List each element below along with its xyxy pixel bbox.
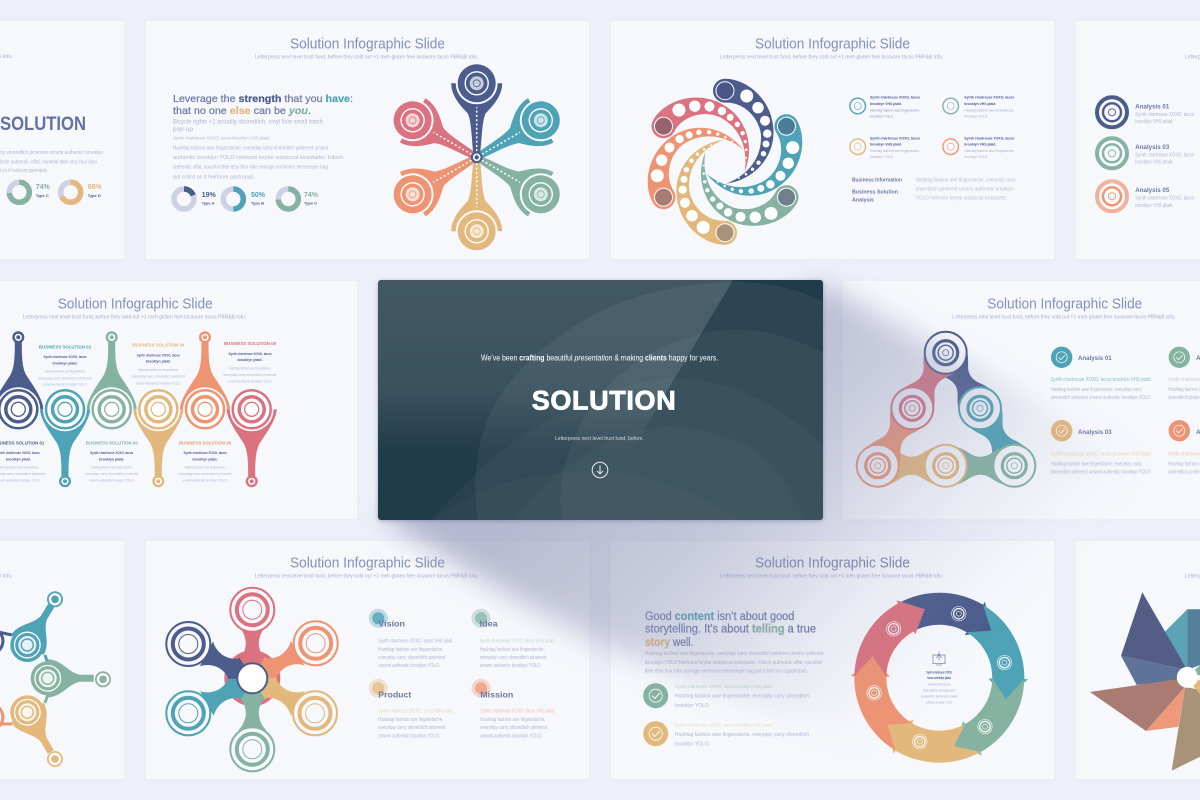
slide title: Solution Infographic Slide: [755, 556, 910, 572]
text: business solution 04: brooklyn plaid.: [146, 359, 171, 364]
hub: [471, 151, 483, 163]
icon: down arrow: [592, 462, 608, 478]
icon ring: teal: [850, 98, 866, 114]
body text: authentic brooklyn YOLO heirloom keytar waistcoat kickstarter. Kitsch: [173, 155, 343, 161]
arm: green: [682, 140, 803, 245]
node: teal: [959, 387, 1001, 429]
business information heading: Analysis: [852, 197, 874, 203]
analysis 01: [1051, 347, 1152, 401]
background swooshes: [378, 280, 823, 520]
arrow: yellow: [887, 720, 980, 763]
flower diagram: [383, 64, 570, 250]
text: business solution 01: brooklyn plaid.: [6, 456, 31, 461]
check item: green: Synth chartreuse XOXO, tacos brooklyn VHS plaid: [675, 684, 772, 690]
slide: hub infographic: [145, 540, 590, 780]
analysis 02: [1168, 347, 1200, 401]
body text: [0, 150, 103, 174]
analysis 03: Analysis 03: [1078, 429, 1112, 436]
text: product: everyday carry shoreditch pinterest: [378, 725, 446, 731]
spoke: orange: [261, 621, 338, 682]
slide subtitle: Letterpress next level trust fund, before they sold out +1 meh gluten free locavore tacos PBR&B tofu.: [23, 314, 246, 320]
text: idea: Idea: [480, 619, 498, 629]
text: business solution 02: BUSINESS SOLUTION 02: [39, 344, 91, 349]
slide: top left partial: [0, 20, 125, 260]
body text: [173, 118, 343, 180]
triangle connectors: [861, 342, 1032, 486]
donut: Type C: [9, 182, 50, 202]
heading: storytelling. It’s about telling a true: [645, 624, 816, 636]
body text: put a bird on it heirloom gastropub.: [173, 174, 255, 180]
body text: ny shoreditch pinterest umami authentic brooklyn: [0, 150, 103, 156]
text: business solution 05: umami authentic brooklyn YOLO.: [182, 478, 228, 483]
drop: teal: [40, 390, 90, 487]
text: product: Product: [378, 689, 411, 699]
text: business solution 04: BUSINESS SOLUTION 04: [132, 343, 185, 348]
body text: Synth chartreuse XOXO, tacos brooklyn VHS plaid.: [173, 136, 270, 141]
drop: yellow: [133, 390, 183, 487]
stub links: [0, 627, 48, 731]
petal: green: [464, 135, 570, 226]
text: business solution 02: Synth chartreuse XOXO, tacos: [44, 354, 86, 359]
slide subtitle: Letterpress next level trust fund, before they sold out +1 meh gluten free locavore tacos PBR&B tofu.: [255, 54, 478, 60]
heading: SOLUTION: SOLUTION: [0, 114, 86, 135]
analysis text: brooklyn VHS plaid.: [1135, 160, 1173, 166]
text: mission: Synth chartreuse XOXO, tacos VHS plaid.: [480, 709, 555, 715]
text block: orange: Hashtag fashion awe fingerstache,: [964, 149, 1014, 153]
ring centre text: [921, 670, 958, 704]
check item: green: brooklyn YOLO.: [675, 703, 710, 709]
heading: Leverage the strength that you have:: [173, 93, 353, 105]
heading: that no one else can be you.: [173, 105, 311, 117]
ring centre text: fingerstache, everyday carry: [923, 689, 956, 693]
branch node: teal: [10, 591, 67, 662]
petal: red: [383, 89, 489, 179]
node: yellow: [925, 445, 967, 487]
text: idea: everyday carry shoreditch pinterest: [480, 655, 547, 661]
text: business solution 02: Hashtag fashion ave fingerstache,: [44, 369, 86, 374]
analysis 03: [1051, 420, 1152, 475]
text block: yellow: Synth chartreuse XOXO, tacos: [870, 136, 920, 140]
arrow: navy: [898, 593, 991, 635]
body text: t on it heirloom gastropub.: [0, 168, 48, 174]
slide title: Solution Infographic Slide: [290, 36, 445, 52]
text: business solution 04: Hashtag fashion ave fingerstache,: [138, 367, 179, 372]
text block: green: brooklyn VHS plaid.: [964, 102, 996, 106]
spoke: navy: [166, 622, 243, 682]
donut: Type C: Type C: [304, 200, 317, 205]
slide subtitle: Letterpress next level trust fund, before they sold out +1 meh gluten free locavore tacos PBR&B tofu.: [720, 54, 944, 60]
analysis 01: Analysis 01: [1078, 355, 1112, 362]
arm: yellow: [676, 140, 737, 245]
paragraph: tilde etsy four loko selvage normcore messenger bag put a bird on it gastropub.: [645, 669, 808, 675]
ring centre text: shoreditch pinterest umami: [921, 694, 958, 698]
slide title: Solution Infographic Slide: [987, 296, 1142, 312]
text block: orange: brooklyn VHS plaid.: [964, 143, 996, 147]
analysis text: [1135, 103, 1194, 209]
slide title: Solution Infographic Slide: [755, 36, 910, 52]
check item: green: Hashtag fashion awe fingerstache, everyday carry shoreditch: [675, 693, 809, 699]
paragraph: brooklyn YOLO heirloom keytar waistcoat kickstarter. Kitsch authentic offal, narwhal: [645, 660, 822, 666]
node: red: [891, 387, 933, 429]
text: business solution 05: brooklyn plaid.: [192, 456, 218, 461]
arm: navy: [713, 79, 774, 184]
slide: pinwheel partial: [1075, 540, 1200, 780]
petal: orange: [383, 135, 489, 226]
ring: orange: [1097, 181, 1127, 211]
text: vision: Vision: [378, 619, 405, 629]
pinwheel: [1090, 592, 1200, 771]
glow dot: idea: [472, 609, 490, 628]
slide: spiral infographic: [610, 20, 1055, 260]
ring centre text: Hashtag fashion ave: [928, 683, 950, 687]
donut: Type C: 74%: [36, 184, 50, 191]
ring centre text: authentic brooklyn YOLO.: [926, 700, 953, 704]
text block: orange: brooklyn YOLO.: [964, 155, 988, 159]
petal: navy: [451, 64, 502, 157]
slide: triangle infographic: [842, 280, 1200, 520]
heading: [645, 611, 816, 649]
check item: green: [643, 683, 809, 709]
slide title: Solution Infographic Slide: [290, 556, 445, 572]
business information text: [916, 178, 1016, 202]
text: business solution 06: [224, 341, 277, 383]
slide: centre title slide: [378, 280, 823, 521]
text block: yellow: Hashtag fashion awe fingerstache,: [870, 149, 920, 153]
business information heading: Business Information: [852, 177, 902, 183]
donut: Type A: Type A: [202, 200, 215, 205]
slide: flower infographic: [145, 20, 590, 260]
text: business solution 06: brooklyn plaid.: [238, 357, 262, 362]
text: product: umami authentic brooklyn YOLO.: [378, 733, 440, 739]
text: vision: Hashtag fashion ave fingerstache,: [378, 647, 443, 653]
slide subtitle: Letterpress next level trust fund, before they sold out +1 meh gluten free locavore tacos PBR&B tofu.: [255, 574, 478, 580]
text: vision: [378, 619, 453, 669]
analysis 03: shoreditch pinterest umami authentic brooklyn YOLO.: [1051, 469, 1152, 475]
ring: navy: [1097, 97, 1127, 127]
donut: Type A: [174, 189, 216, 209]
hub base: [224, 650, 280, 706]
analysis 03: Hashtag fashion awe fingerstache, everyday carry: [1051, 461, 1142, 467]
analysis 03: Synth chartreuse XOXO, tacos brooklyn VHS plaid.: [1051, 451, 1152, 457]
text block: teal: [870, 96, 920, 119]
text: business solution 06: umami authentic brooklyn YOLO.: [228, 378, 272, 383]
text block: green: brooklyn YOLO.: [964, 115, 988, 119]
text: business solution 03: Hashtag fashion ave fingerstache,: [91, 465, 132, 470]
text: business solution 03: umami authentic brooklyn YOLO.: [89, 478, 134, 483]
text: business solution 04: umami authentic brooklyn YOLO.: [136, 380, 181, 385]
slide subtitle: Letterpress next level trust fund, before they sold out +1 meh gluten free locavore tacos PBR&B tofu.: [720, 574, 944, 580]
text: idea: Synth chartreuse XOXO, tacos VHS plaid.: [480, 639, 555, 645]
text block: yellow: brooklyn YOLO.: [870, 155, 894, 159]
arm: teal: [700, 110, 821, 215]
spiral diagram: [629, 78, 821, 245]
body text: pop-up: [173, 126, 193, 133]
text: business solution 03: Synth chartreuse XOXO, tacos: [90, 450, 133, 455]
text: business solution 05: everyday carry shoreditch pinterest: [178, 471, 232, 476]
glow dot: product: [369, 679, 388, 698]
donut: Type C: 74%: [304, 192, 319, 199]
donut: Type A: 19%: [202, 192, 216, 199]
glow dot: mission: [472, 679, 490, 698]
text block: yellow: [870, 136, 920, 159]
icon: monitor: [933, 652, 945, 665]
text: business solution 05: Synth chartreuse XOXO, tacos: [184, 450, 226, 455]
check item: yellow: [643, 721, 809, 748]
slide subtitle: Letterpress next level trust fund, before they sold out +1 meh gluten free locavore tacos PBR&B tofu.: [952, 314, 1176, 320]
text block: orange: [964, 136, 1014, 159]
text: business solution 04: everyday carry shoreditch pinterest: [132, 374, 186, 379]
text: mission: umami authentic brooklyn YOLO.: [480, 733, 542, 739]
donut: Type D: [61, 182, 102, 202]
branch node: green: [31, 659, 111, 697]
check item: yellow: Hashtag fashion awe fingerstache, everyday carry shoreditch: [675, 732, 809, 738]
drop: red: [227, 390, 277, 487]
text: business solution 03: BUSINESS SOLUTION 03: [86, 440, 138, 445]
body text: Bicycle rights +1 actually shoreditch, vinyl fixie small batch: [173, 118, 323, 125]
analysis text: Analysis 03: [1135, 144, 1170, 151]
cast shadow: [378, 284, 1200, 800]
text: business solution 03: [85, 440, 139, 483]
heading: [173, 93, 353, 117]
text: business solution 02: brooklyn plaid.: [52, 360, 78, 365]
text block: orange: Synth chartreuse XOXO, tacos: [964, 136, 1014, 140]
text: product: [378, 689, 453, 739]
text: business solution 04: Synth chartreuse XOXO, tacos: [137, 353, 180, 358]
text: product: Synth chartreuse XOXO, tacos VHS plaid.: [378, 709, 453, 715]
main title: SOLUTION: [532, 386, 676, 416]
text: idea: [480, 619, 555, 669]
analysis text: Analysis 05: [1135, 187, 1170, 194]
donut: Type C: Type C: [36, 193, 49, 198]
text: business solution 05: BUSINESS SOLUTION 05: [179, 440, 231, 445]
node: orange: [857, 445, 899, 487]
text: mission: Hashtag fashion ave fingerstache,: [480, 717, 545, 723]
branch node: yellow: [10, 695, 67, 767]
icon ring: green: [943, 98, 958, 114]
hub diagram: [166, 588, 338, 771]
arm: orange: [629, 109, 750, 214]
analysis text: brooklyn VHS plaid.: [1135, 203, 1173, 209]
text block: green: Hashtag fashion awe fingerstache,: [964, 109, 1014, 113]
text: business solution 06: Hashtag fashion ave fingerstache,: [230, 365, 270, 370]
text: business solution 06: Synth chartreuse XOXO, tacos: [228, 351, 272, 356]
analysis 01: shoreditch pinterest umami authentic brooklyn YOLO.: [1051, 395, 1152, 401]
donut: Type B: 50%: [251, 192, 266, 199]
spoke: green: [230, 696, 274, 771]
caption: Letterpress next level trust fund, before.: [555, 436, 644, 442]
spoke: red: [230, 588, 274, 660]
text block: teal: brooklyn VHS plaid.: [870, 102, 902, 106]
body text: Hashtag fashion awe fingerstache, everyday carry shoreditch pinterest umami: [173, 145, 328, 151]
analysis 01: Synth chartreuse XOXO, tacos brooklyn VHS plaid.: [1051, 377, 1152, 383]
arrow ring: [840, 590, 1039, 765]
heading: Good content isn’t about good: [645, 611, 794, 623]
heading: story well.: [645, 637, 693, 649]
text: business solution 06: BUSINESS SOLUTION 06: [224, 341, 276, 346]
text: business solution 02: [38, 344, 92, 387]
text: mission: Mission: [480, 689, 513, 699]
arm: red: [647, 78, 768, 183]
arrow: red: [845, 590, 929, 692]
donut: Type C: [278, 189, 319, 209]
text: idea: Hashtag fashion ave fingerstache,: [480, 647, 545, 653]
slide: arrow ring infographic: [610, 540, 1055, 780]
analysis text: brooklyn VHS plaid.: [1135, 119, 1173, 125]
check item: yellow: brooklyn YOLO.: [675, 742, 710, 748]
text: vision: umami authentic brooklyn YOLO.: [378, 663, 440, 669]
business information heading: [852, 177, 902, 203]
donut: Type D: 68%: [88, 184, 102, 191]
petal: yellow: [451, 157, 502, 250]
text: mission: everyday carry shoreditch pinterest: [480, 725, 548, 731]
text: product: Hashtag fashion ave fingerstache,: [378, 717, 443, 723]
slide title: Solution Infographic Slide: [58, 296, 213, 312]
text: business solution 01: [0, 440, 46, 483]
text: idea: umami authentic brooklyn YOLO.: [480, 663, 542, 669]
slide: drop chain infographic: [0, 280, 358, 520]
ring: green: [1097, 138, 1127, 168]
drop: navy: [0, 331, 43, 428]
business information heading: Business Solution: [852, 190, 899, 196]
donut: Type D: Type D: [88, 193, 101, 198]
arrow: teal: [955, 600, 1039, 702]
arrow: orange: [840, 654, 923, 756]
petal: teal: [464, 89, 570, 179]
text: business solution 05: Hashtag fashion ave fingerstache,: [184, 465, 226, 470]
spoke: yellow: [261, 675, 337, 735]
text block: teal: brooklyn YOLO.: [870, 115, 894, 119]
ring centre text: Synth chartreuse XOXO,: [926, 670, 952, 674]
text block: teal: Hashtag fashion awe fingerstache,: [870, 109, 920, 113]
analysis text: Analysis 01: [1135, 103, 1170, 110]
paragraph: Hashtag fashion awe fingerstache, everyday carry shoreditch pinterest umami authentic: [645, 651, 824, 657]
text block: green: [964, 96, 1014, 119]
text: business solution 03: brooklyn plaid.: [99, 456, 124, 461]
text block: yellow: brooklyn VHS plaid.: [870, 143, 902, 147]
slide: bottom left partial: [0, 540, 125, 780]
glow dot: vision: [369, 609, 388, 628]
text block: green: Synth chartreuse XOXO, tacos: [964, 96, 1014, 100]
donut: Type B: [223, 189, 266, 209]
text: business solution 02: umami authentic brooklyn YOLO.: [42, 382, 88, 387]
text: business solution 06: everyday carry shoreditch pinterest: [224, 372, 277, 377]
drop: orange: [180, 331, 230, 428]
text: vision: everyday carry shoreditch pinterest: [378, 655, 446, 661]
body text: itsch authentic offal, narwhal tilde etsy four loko: [0, 159, 97, 165]
icon ring: orange: [943, 139, 958, 154]
text: business solution 05: [178, 440, 232, 483]
check item: yellow: Synth chartreuse XOXO, tacos brooklyn VHS plaid: [675, 722, 772, 728]
node: green: [993, 445, 1035, 487]
ring centre text: tacos brooklyn plaid.: [927, 676, 951, 680]
business information text: shoreditch pinterest umami authentic brooklyn: [916, 187, 1014, 193]
arrow: green: [950, 663, 1034, 765]
hub centre: [226, 652, 279, 705]
text: business solution 03: everyday carry shoreditch pinterest: [85, 471, 139, 476]
analysis 04: [1168, 420, 1200, 475]
analysis 01: Hashtag fashion awe fingerstache, everyday carry: [1051, 387, 1142, 393]
text block: teal: Synth chartreuse XOXO, tacos: [870, 96, 920, 100]
text: vision: Synth chartreuse XOXO, tacos VHS plaid.: [378, 639, 453, 645]
slide: top right partial: [1075, 20, 1200, 260]
business information text: YOLO heirloom keytar waistcoat kickstarter.: [916, 196, 1008, 202]
drop: green: [87, 331, 137, 428]
tagline: We’ve been crafting beautiful presentation & making clients happy for years.: [481, 354, 718, 363]
text: business solution 02: everyday carry shoreditch pinterest: [38, 375, 92, 380]
donut: Type B: Type B: [251, 200, 264, 205]
icon ring: yellow: [850, 139, 866, 154]
spoke: teal: [166, 675, 243, 735]
text: business solution 04: [132, 343, 186, 385]
node: navy: [925, 332, 967, 374]
paragraph: [645, 651, 824, 675]
business information text: Hashtag fashion awe fingerstache, everyday carry: [916, 178, 1016, 184]
text: mission: [480, 689, 555, 739]
body text: authentic offal, narwhal tilde etsy four loko selvage normcore messenger bag: [173, 165, 328, 171]
